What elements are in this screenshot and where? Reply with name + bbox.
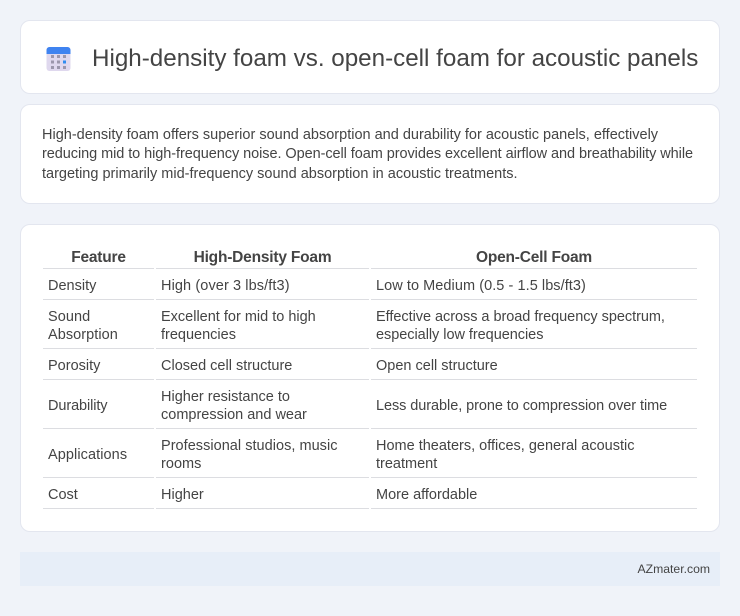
row: Cost: Cost	[48, 487, 78, 503]
row: Cost: Higher	[161, 487, 204, 503]
footer credit: AZmater.com	[638, 562, 710, 576]
row: Sound Absorption: Excellent for mid to high	[161, 309, 316, 325]
row: Applications	[48, 438, 634, 472]
row: Applications: treatment	[376, 456, 437, 472]
summary text: targeting primarily mid-frequency sound absorption in acoustic treatments.	[42, 166, 518, 182]
row: Sound Absorption: especially low frequencies	[376, 327, 543, 343]
row: Porosity	[48, 358, 498, 374]
icon: calendar grid	[46, 47, 70, 71]
row: Sound Absorption: Effective across a broad frequency spectrum,	[376, 309, 665, 325]
row: Durability: Higher resistance to	[161, 389, 290, 405]
row: Density: Density	[48, 278, 96, 294]
row: Sound Absorption: Absorption	[48, 327, 118, 343]
summary text: reducing mid to high-frequency noise. Open-cell foam provides excellent airflow and breathability while	[42, 146, 693, 162]
row: Durability	[48, 389, 667, 423]
row: Durability: Durability	[48, 398, 107, 414]
row: Applications: Professional studios, music	[161, 438, 338, 454]
column header: High-Density Foam: High-Density Foam	[194, 249, 331, 266]
row: Durability: Less durable, prone to compression over time	[376, 398, 667, 414]
row: Applications: Applications	[48, 447, 127, 463]
row: Density: High (over 3 lbs/ft3)	[161, 278, 290, 294]
row: Cost: More affordable	[376, 487, 477, 503]
row: Density	[48, 278, 586, 294]
row: Density: Low to Medium (0.5 - 1.5 lbs/ft3)	[376, 278, 586, 294]
panel: summary card	[20, 104, 720, 204]
row: Sound Absorption: frequencies	[161, 327, 236, 343]
title: High-density foam vs. open-cell foam for acoustic panels	[92, 45, 698, 72]
summary text: High-density foam offers superior sound absorption and durability for acoustic panels, effectively	[42, 127, 658, 143]
row: Porosity: Closed cell structure	[161, 358, 292, 374]
row: Durability: compression and wear	[161, 407, 307, 423]
column header: Open-Cell Foam: Open-Cell Foam	[476, 249, 592, 266]
summary text	[42, 127, 693, 182]
row: Sound Absorption	[48, 309, 665, 343]
panel: title card	[20, 20, 720, 94]
row: Applications: Home theaters, offices, general acoustic	[376, 438, 634, 454]
row: Applications: rooms	[161, 456, 201, 472]
column header: Feature: Feature	[71, 249, 126, 266]
row: Cost	[48, 487, 477, 503]
panel: comparison table card	[20, 224, 720, 532]
row: Porosity: Open cell structure	[376, 358, 498, 374]
row: Porosity: Porosity	[48, 358, 100, 374]
footer bar	[20, 552, 720, 586]
row: Sound Absorption: Sound	[48, 309, 90, 325]
